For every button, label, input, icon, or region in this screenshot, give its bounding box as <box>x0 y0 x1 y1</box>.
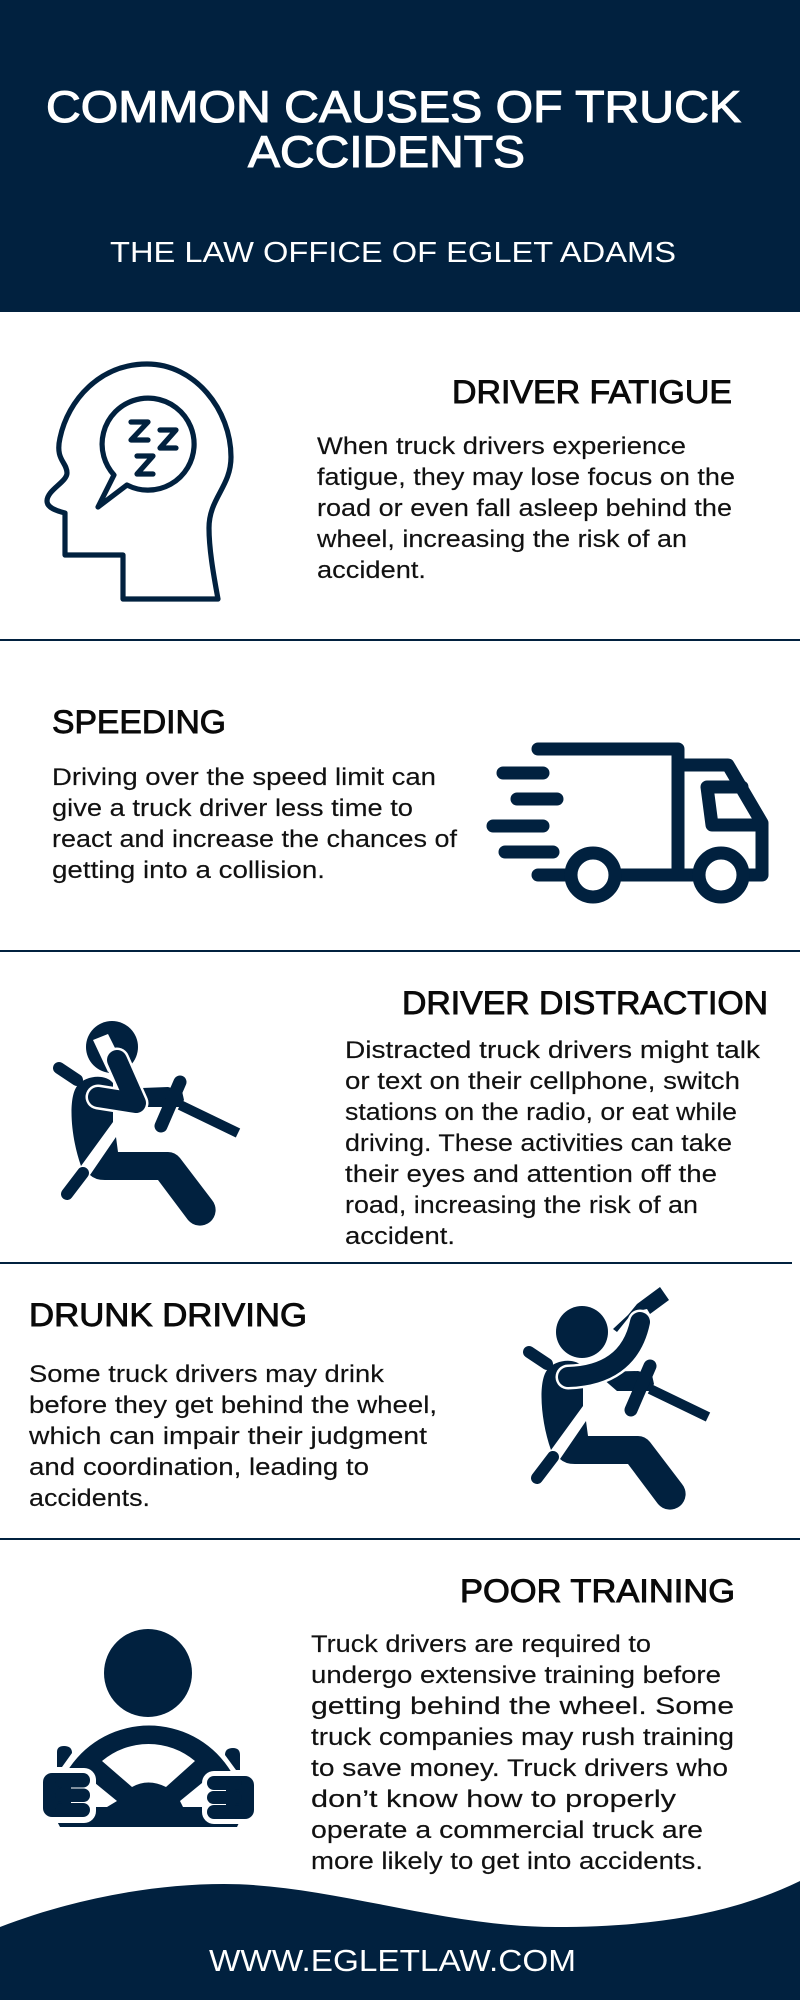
panel: speeding <box>52 704 762 897</box>
body text: getting into a collision. <box>52 857 325 884</box>
heading: DRIVER FATIGUE <box>452 374 732 410</box>
body text: accidents. <box>29 1485 150 1512</box>
body text: don’t know how to properly <box>311 1786 677 1813</box>
body text: to save money. Truck drivers who <box>311 1755 728 1782</box>
panel: driver fatigue <box>47 364 735 599</box>
body text: Some truck drivers may drink <box>29 1361 385 1388</box>
body text <box>316 433 735 584</box>
body text: stations on the radio, or eat while <box>345 1099 737 1126</box>
body text: driving. These activities can take <box>345 1130 732 1157</box>
website URL: WWW.EGLETLAW.COM <box>209 1944 576 1978</box>
body text: When truck drivers experience <box>317 433 686 460</box>
icon: driver drinking from bottle <box>529 1287 708 1510</box>
body text: operate a commercial truck are <box>311 1817 703 1844</box>
body text: and coordination, leading to <box>29 1454 369 1481</box>
body text: react and increase the chances of <box>52 826 457 853</box>
body text: Distracted truck drivers might talk <box>345 1037 761 1064</box>
body text: or text on their cellphone, switch <box>345 1068 740 1095</box>
panel: driver distraction <box>59 985 768 1250</box>
body text: accident. <box>317 557 426 584</box>
heading: POOR TRAINING <box>460 1573 735 1609</box>
panel: drunk driving <box>28 1287 708 1512</box>
panel: poor training <box>38 1573 735 1875</box>
body text: Driving over the speed limit can <box>52 764 436 791</box>
title: ACCIDENTS <box>248 128 525 177</box>
icon: driver holding steering wheel <box>38 1629 262 1827</box>
icon: sleepy head <box>47 364 231 599</box>
footer wave <box>0 1881 800 2000</box>
body text: give a truck driver less time to <box>52 795 413 822</box>
body text: which can impair their judgment <box>28 1423 427 1450</box>
body text <box>311 1631 734 1875</box>
header banner <box>0 0 800 312</box>
heading: DRIVER DISTRACTION <box>402 985 768 1021</box>
body text: more likely to get into accidents. <box>311 1848 703 1875</box>
icon: driver using phone <box>59 1021 238 1226</box>
body text: Truck drivers are required to <box>311 1631 651 1658</box>
body text: undergo extensive training before <box>311 1662 721 1689</box>
icon: speeding truck <box>493 749 762 897</box>
heading: DRUNK DRIVING <box>29 1297 307 1333</box>
body text <box>52 764 457 884</box>
body text: road, increasing the risk of an <box>345 1192 698 1219</box>
body text <box>28 1361 437 1512</box>
body text: truck companies may rush training <box>311 1724 734 1751</box>
body text: their eyes and attention off the <box>345 1161 717 1188</box>
body text: accident. <box>345 1223 455 1250</box>
title <box>46 83 741 177</box>
title: COMMON CAUSES OF TRUCK <box>46 83 741 132</box>
body text: wheel, increasing the risk of an <box>316 526 687 553</box>
body text: before they get behind the wheel, <box>29 1392 437 1419</box>
heading: SPEEDING <box>52 704 226 740</box>
subtitle: THE LAW OFFICE OF EGLET ADAMS <box>110 237 676 269</box>
body text <box>345 1037 761 1250</box>
body text: road or even fall asleep behind the <box>317 495 732 522</box>
body text: fatigue, they may lose focus on the <box>317 464 735 491</box>
body text: getting behind the wheel. Some <box>311 1693 734 1720</box>
